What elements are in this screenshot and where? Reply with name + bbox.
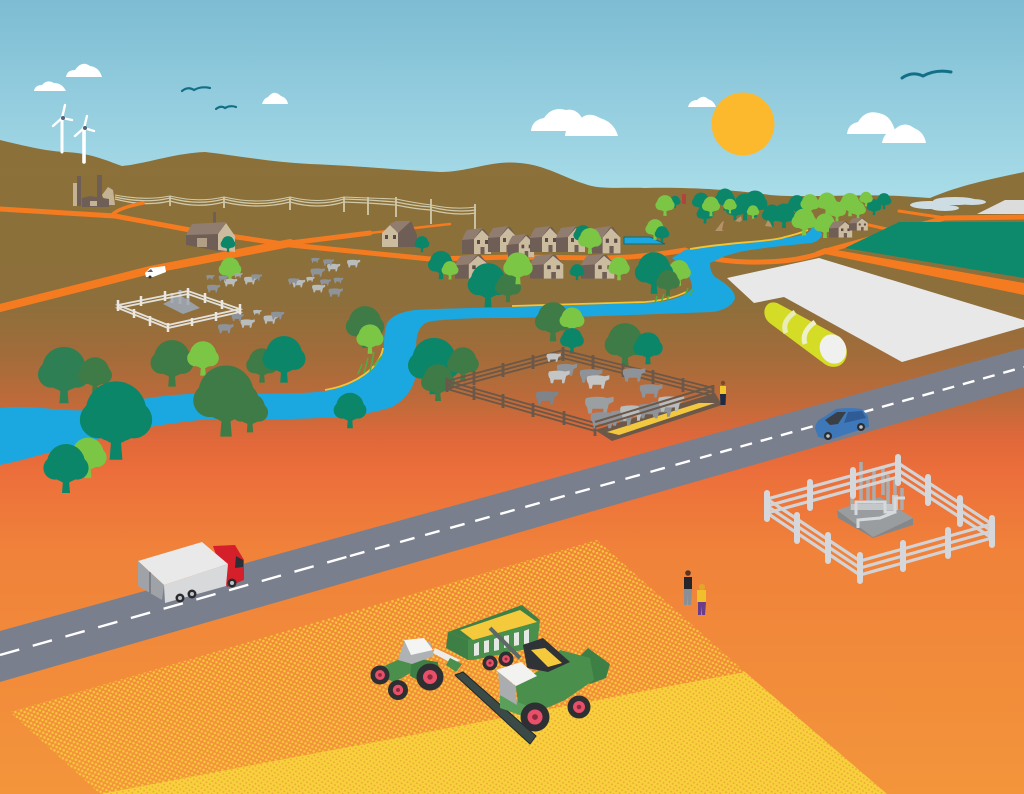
wheat field ripe crop — [100, 672, 887, 794]
silage tube — [764, 302, 851, 368]
white van — [145, 266, 166, 278]
farmhouse — [186, 212, 235, 252]
grain trailer — [446, 605, 540, 670]
cattle — [536, 353, 684, 428]
green crop field — [845, 222, 1024, 278]
feed trough — [595, 393, 722, 441]
middle-distance trees — [219, 219, 691, 307]
feedlot back fence — [447, 347, 713, 436]
farm dam — [624, 237, 665, 244]
river — [0, 225, 822, 465]
far houses — [829, 218, 868, 238]
feedlot front fence — [595, 386, 713, 427]
header reel — [455, 672, 536, 744]
river banks — [325, 230, 808, 390]
grazing stock — [206, 258, 360, 333]
highway — [0, 348, 1024, 682]
birds — [182, 71, 951, 109]
substation rails — [767, 463, 992, 575]
distant tree line — [655, 189, 891, 238]
orange dirt roads — [0, 203, 1024, 309]
tractor and grain trailer — [370, 605, 610, 744]
feedlot trees — [408, 302, 663, 401]
factory — [73, 175, 115, 207]
stockman — [720, 381, 726, 405]
wheat field unharvested rows — [10, 540, 745, 794]
combine harvester — [496, 638, 610, 732]
clouds — [34, 64, 926, 143]
far grey field — [977, 200, 1024, 214]
town houses — [455, 226, 620, 279]
farmhouse 2 — [382, 221, 417, 247]
delivery truck — [138, 542, 244, 603]
substation posts — [767, 457, 992, 581]
reeds — [358, 288, 693, 374]
wind turbines — [53, 105, 94, 162]
sky — [0, 0, 1024, 210]
substation plant — [837, 462, 913, 538]
tractor — [370, 638, 462, 700]
substation with fence — [767, 457, 992, 581]
cattle feedlot — [447, 347, 726, 441]
blue car — [815, 408, 869, 440]
sun — [712, 92, 774, 156]
white paddock — [727, 258, 1024, 362]
auger — [490, 628, 520, 658]
kangaroos — [715, 216, 772, 231]
farmers — [684, 570, 706, 615]
power line — [115, 195, 476, 233]
solar farm — [910, 197, 986, 211]
sheep yard with white fence — [118, 288, 240, 332]
foreground left trees — [38, 306, 384, 493]
